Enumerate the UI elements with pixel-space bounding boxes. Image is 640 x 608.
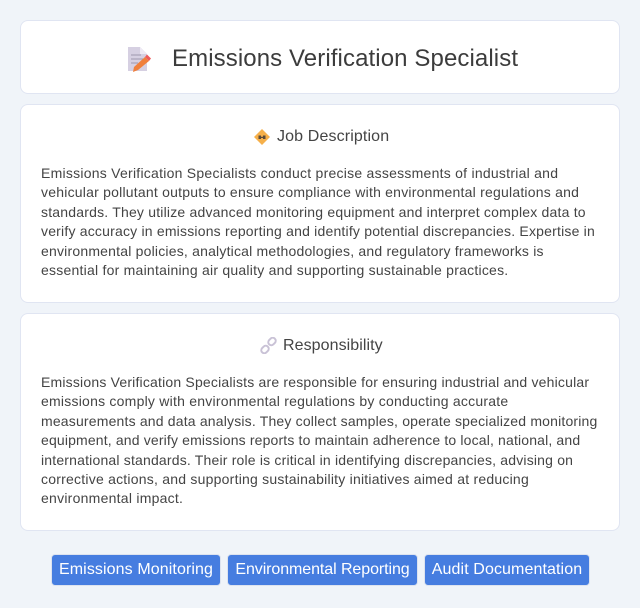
tag: emissions monitoring bbox=[51, 554, 221, 586]
icon: document with pencil bbox=[128, 47, 151, 72]
text block: job description: verify accuracy in emissions reporting and identify potential discrepancies. Expertise in bbox=[41, 223, 595, 239]
text block: responsibility: equipment, and verify emissions reports to maintain adherence to local, national, and bbox=[41, 432, 580, 448]
icon: chain link bbox=[260, 337, 277, 354]
tag: audit documentation: Audit Documentation bbox=[432, 561, 582, 578]
heading: responsibility: Responsibility bbox=[283, 337, 383, 354]
icon: diamond sign bbox=[254, 129, 270, 145]
text block: responsibility: Emissions Verification Specialists are responsible for ensuring industrial and vehicular bbox=[41, 374, 589, 390]
text block: responsibility: measurements and data analysis. They collect samples, operate specialized monitoring bbox=[41, 413, 597, 429]
text block: job description: standards. They utilize advanced monitoring equipment and interpret complex data to bbox=[41, 204, 586, 220]
text block: job description: Emissions Verification Specialists conduct precise assessments of industrial and bbox=[41, 165, 558, 181]
text block: responsibility bbox=[41, 374, 597, 506]
tag: environmental reporting bbox=[227, 554, 418, 586]
panel: responsibility bbox=[20, 313, 620, 531]
title: Emissions Verification Specialist bbox=[172, 45, 518, 72]
text block: job description: vehicular pollutant outputs to ensure compliance with environmental regulations and bbox=[41, 184, 579, 200]
tag: emissions monitoring: Emissions Monitoring bbox=[59, 561, 213, 578]
text block: responsibility: emissions comply with environmental regulations by conducting accurate bbox=[41, 393, 508, 409]
text block: job description: environmental policies, analytical methodologies, and regulatory frameworks is bbox=[41, 243, 544, 259]
tag: environmental reporting: Environmental Reporting bbox=[235, 561, 410, 578]
panel: job description bbox=[20, 104, 620, 303]
text block: responsibility: environmental impact. bbox=[41, 490, 183, 506]
tag: audit documentation bbox=[424, 554, 590, 586]
text block: job description bbox=[41, 165, 595, 278]
panel: title card bbox=[20, 20, 620, 94]
text block: responsibility: international standards. Their role is critical in identifying discrepancies, advising on bbox=[41, 452, 573, 468]
text block: job description: essential for maintaining air quality and supporting sustainable practices. bbox=[41, 262, 508, 278]
text block: responsibility: corrective actions, and supporting sustainability initiatives aimed at reducing bbox=[41, 471, 529, 487]
heading: job description: Job Description bbox=[277, 128, 389, 145]
